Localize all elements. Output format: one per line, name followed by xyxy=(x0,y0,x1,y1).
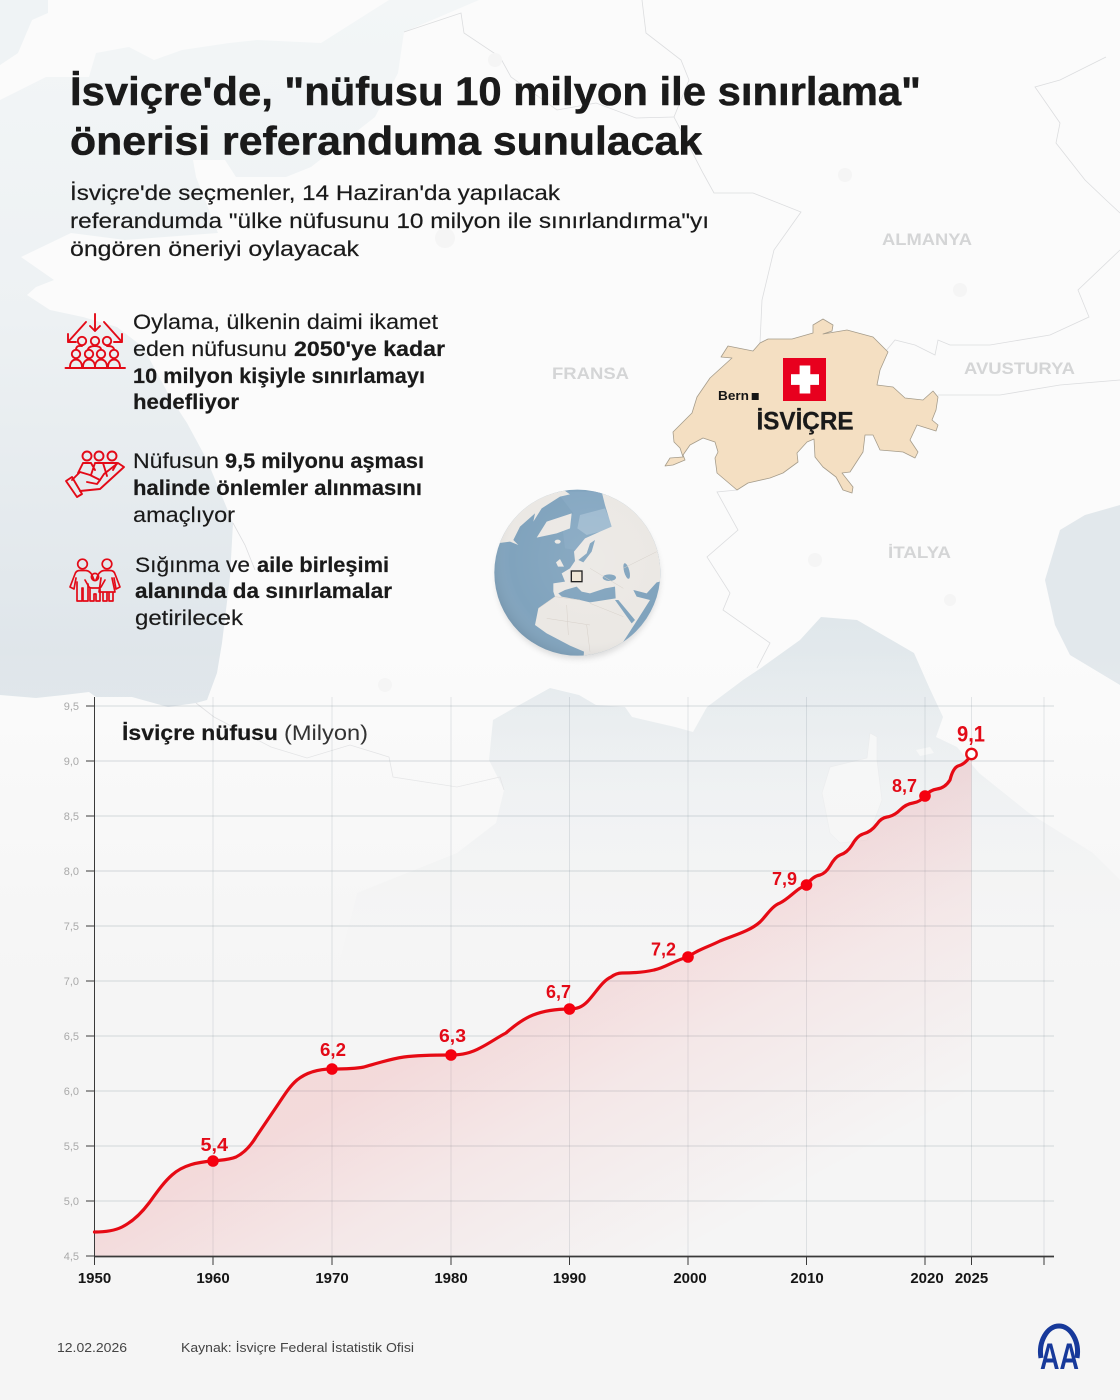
x axis labels: 1960 xyxy=(196,1270,230,1287)
text: 9,5 milyonu aşması xyxy=(225,450,424,473)
data labels: 7,2 xyxy=(651,940,676,960)
text: getirilecek xyxy=(135,607,244,630)
population curve xyxy=(94,754,972,1232)
chart title: (Milyon) xyxy=(284,722,368,745)
subtitle: öngören öneriyi oylayacak xyxy=(70,237,359,261)
text: Oylama, ülkenin daimi ikamet xyxy=(133,311,438,334)
text xyxy=(133,311,445,414)
locator square xyxy=(571,571,582,582)
subtitle xyxy=(70,181,709,261)
subtitle: İsviçre'de seçmenler, 14 Haziran'da yapılacak xyxy=(70,181,560,205)
x axis labels: 2020 xyxy=(910,1270,944,1287)
x axis labels: 2000 xyxy=(673,1270,707,1287)
country labels xyxy=(552,230,1075,562)
capital label: Bern: Bern xyxy=(718,389,749,403)
text: Sığınma ve xyxy=(135,554,250,577)
title: önerisi referanduma sunulacak xyxy=(70,120,703,164)
data labels: 6,7 xyxy=(546,982,571,1002)
data labels: 6,3 xyxy=(439,1026,466,1046)
data labels: 5,4 xyxy=(200,1135,228,1155)
text: aile birleşimi xyxy=(257,554,389,577)
x axis labels xyxy=(78,1270,988,1287)
y axis labels: 7,5 xyxy=(64,921,79,933)
text: 2050'ye kadar xyxy=(294,338,445,361)
text xyxy=(135,554,392,630)
text: alanında da sınırlamalar xyxy=(135,580,392,603)
y axis labels: 8,5 xyxy=(64,811,79,823)
line chart: population xyxy=(64,697,1054,1287)
logo: AA: AA xyxy=(1040,1336,1079,1377)
x axis labels: 1990 xyxy=(553,1270,586,1287)
data labels xyxy=(200,722,985,1155)
icon: family xyxy=(70,559,120,601)
panel: Switzerland map xyxy=(665,319,938,493)
data labels: 9,1 xyxy=(957,722,985,746)
y axis labels: 9,5 xyxy=(64,701,79,713)
data labels: 8,7 xyxy=(892,776,917,796)
y axis labels xyxy=(64,701,79,1263)
country labels: ALMANYA xyxy=(882,230,972,249)
bullet: 9.5 million threshold xyxy=(66,450,424,527)
chart title: İsviçre nüfusu xyxy=(122,722,278,745)
bullet: asylum and family reunification xyxy=(70,554,392,630)
capital label: Bern xyxy=(718,389,759,403)
x axis labels: 1970 xyxy=(315,1270,349,1287)
data points xyxy=(207,749,977,1167)
y axis labels: 5,0 xyxy=(64,1196,79,1208)
text: amaçlıyor xyxy=(133,504,235,527)
text: 10 milyon kişiyle sınırlamayı xyxy=(133,365,425,388)
icon: crowd with arrows xyxy=(66,314,125,368)
y axis labels: 9,0 xyxy=(64,756,79,768)
text: hedefliyor xyxy=(133,391,239,414)
country name: İSVİÇRE xyxy=(756,408,854,436)
y axis labels: 8,0 xyxy=(64,866,79,878)
x axis labels: 2025 xyxy=(955,1270,988,1287)
x axis labels: 1980 xyxy=(434,1270,468,1287)
y axis labels: 5,5 xyxy=(64,1141,79,1153)
x axis labels: 2010 xyxy=(790,1270,824,1287)
bullet: population limit xyxy=(66,311,445,414)
text: eden nüfusunu xyxy=(133,338,287,361)
country labels: FRANSA xyxy=(552,364,629,383)
subtitle: referandumda "ülke nüfusunu 10 milyon ile sınırlandırma"yı xyxy=(70,209,709,233)
globe locator xyxy=(490,485,667,660)
text: Nüfusun xyxy=(133,450,219,473)
text: halinde önlemler alınmasını xyxy=(133,477,422,500)
footer date: 12.02.2026 xyxy=(57,1341,127,1355)
country labels: AVUSTURYA xyxy=(964,359,1075,378)
y axis labels: 7,0 xyxy=(64,976,79,988)
footer source: Kaynak: İsviçre Federal İstatistik Ofisi xyxy=(181,1341,414,1355)
icon: people in hand xyxy=(66,452,124,497)
x axis labels: 1950 xyxy=(78,1270,111,1287)
Switzerland shape xyxy=(665,319,938,493)
data labels: 6,2 xyxy=(320,1040,346,1060)
title xyxy=(70,70,921,164)
y axis labels: 4,5 xyxy=(64,1251,79,1263)
icon: Swiss flag xyxy=(783,358,826,401)
country labels: İTALYA xyxy=(888,543,951,562)
logo: AA xyxy=(1040,1326,1079,1377)
axes xyxy=(86,697,1054,1265)
y axis labels: 6,5 xyxy=(64,1031,79,1043)
chart title xyxy=(122,722,368,745)
y axis labels: 6,0 xyxy=(64,1086,79,1098)
text xyxy=(133,450,424,527)
area under curve xyxy=(94,754,972,1256)
title: İsviçre'de, "nüfusu 10 milyon ile sınırlama" xyxy=(70,70,921,114)
data labels: 7,9 xyxy=(772,869,797,889)
